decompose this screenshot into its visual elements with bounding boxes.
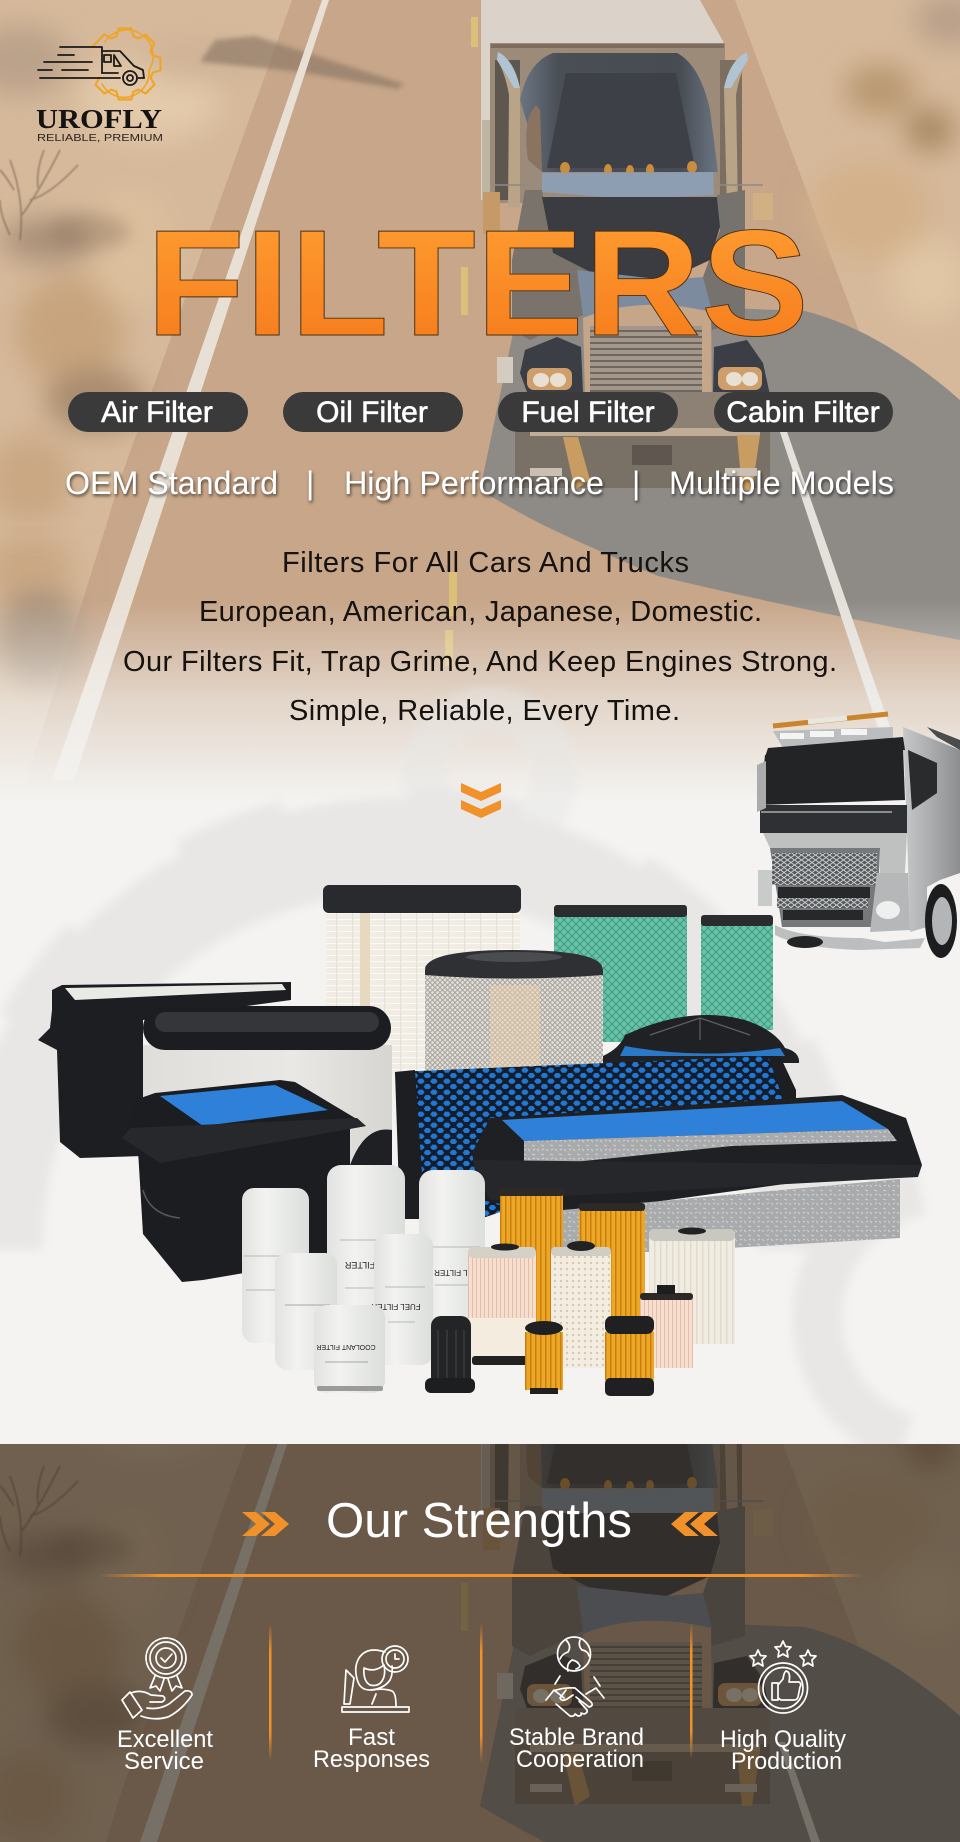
- description text: Filters For All Cars And Trucks: [282, 547, 689, 579]
- label: [509, 1724, 644, 1773]
- feature line: OEM Standard: [65, 465, 278, 501]
- pill: cabin filter: Cabin Filter: [726, 396, 880, 429]
- icon: globe and handshake: [546, 1637, 604, 1716]
- logo wordmark: UROFLY: [36, 104, 162, 134]
- label: [117, 1726, 213, 1775]
- air filter: tall white pleated: [323, 885, 521, 1075]
- icon: right chevrons: [242, 1512, 289, 1536]
- icon: gear and truck: [38, 28, 160, 100]
- canister 5: [371, 1234, 433, 1365]
- lower background with gear watermark: [0, 710, 960, 1444]
- pill: fuel filter: Fuel Filter: [521, 396, 655, 429]
- canister 5: FUEL FILTER: [371, 1302, 421, 1311]
- icon: medal on hand: [122, 1638, 192, 1719]
- icon: left chevrons: [671, 1512, 718, 1536]
- logo tagline: RELIABLE, PREMIUM: [37, 132, 163, 144]
- filter type pills: [68, 392, 893, 432]
- label: Responses: [313, 1746, 430, 1773]
- pill: oil filter: [283, 392, 463, 432]
- logo: [36, 28, 163, 144]
- description text: European, American, Japanese, Domestic.: [199, 596, 762, 628]
- feature line: [65, 465, 894, 501]
- canisters: white oil filters: [242, 1165, 485, 1393]
- pill: air filter: Air Filter: [101, 396, 213, 429]
- cabin filter: black with blue top: [122, 1080, 366, 1282]
- cabin filter: grey and blue panel: [472, 1095, 922, 1252]
- heading: our strengths: Our Strengths: [326, 1494, 632, 1548]
- pill: fuel filter: [498, 392, 678, 432]
- strengths background: [0, 1444, 960, 1842]
- canister 3: OIL FILTER: [434, 1268, 476, 1277]
- strength: fast responses: [313, 1646, 430, 1773]
- label: Service: [124, 1748, 204, 1775]
- canister 6: [314, 1305, 385, 1393]
- canister 3: [419, 1170, 485, 1320]
- air filter: large green mesh: [554, 905, 687, 1042]
- description text: [123, 547, 837, 727]
- road continuation below the truck: [0, 526, 960, 800]
- canister 1: [242, 1188, 309, 1343]
- air filter: small green mesh: [701, 915, 773, 1030]
- strength: excellent service: [117, 1638, 213, 1775]
- air filter: blue honeycomb: [395, 1056, 796, 1219]
- icon: agent with clock: [342, 1646, 409, 1712]
- title: FILTERS: [146, 198, 809, 367]
- canister 6: COOLANT FILTER: [316, 1343, 376, 1350]
- air filter: round metal mesh: [425, 950, 603, 1075]
- fuel filters: yellow and cream cartridges: [425, 1188, 735, 1396]
- feature line: Multiple Models: [669, 465, 894, 501]
- canister 4: [275, 1253, 337, 1370]
- canister 2: FILTER: [344, 1260, 375, 1270]
- canister 2: [327, 1165, 405, 1313]
- label: Production: [731, 1748, 842, 1775]
- icon: stars and thumbs up: [750, 1641, 816, 1713]
- panel: our strengths: [0, 1311, 960, 1842]
- top scene: truck on desert road: [0, 0, 960, 801]
- feature line: |: [306, 465, 314, 501]
- label: Cooperation: [516, 1746, 644, 1773]
- pill: oil filter: Oil Filter: [316, 396, 428, 429]
- label: High Quality: [720, 1726, 846, 1753]
- description text: Our Filters Fit, Trap Grime, And Keep Engines Strong.: [123, 646, 837, 678]
- label: [720, 1726, 846, 1775]
- air filter: oval white: [143, 1006, 392, 1166]
- illustration: filter group: [38, 885, 922, 1396]
- label: Fast: [348, 1724, 395, 1751]
- air filter: black box: [38, 982, 291, 1158]
- feature line: |: [632, 465, 640, 501]
- illustration: silver truck: [757, 714, 960, 958]
- strength: stable brand cooperation: [509, 1637, 644, 1773]
- pill: air filter: [68, 392, 248, 432]
- label: [313, 1724, 430, 1773]
- label: Stable Brand: [509, 1724, 644, 1751]
- description text: Simple, Reliable, Every Time.: [289, 695, 680, 727]
- strength: high quality production: [720, 1641, 846, 1775]
- air filter: black vented lid: [603, 1015, 799, 1063]
- feature line: High Performance: [344, 465, 604, 501]
- icon: down chevrons: [461, 783, 501, 818]
- label: Excellent: [117, 1726, 213, 1753]
